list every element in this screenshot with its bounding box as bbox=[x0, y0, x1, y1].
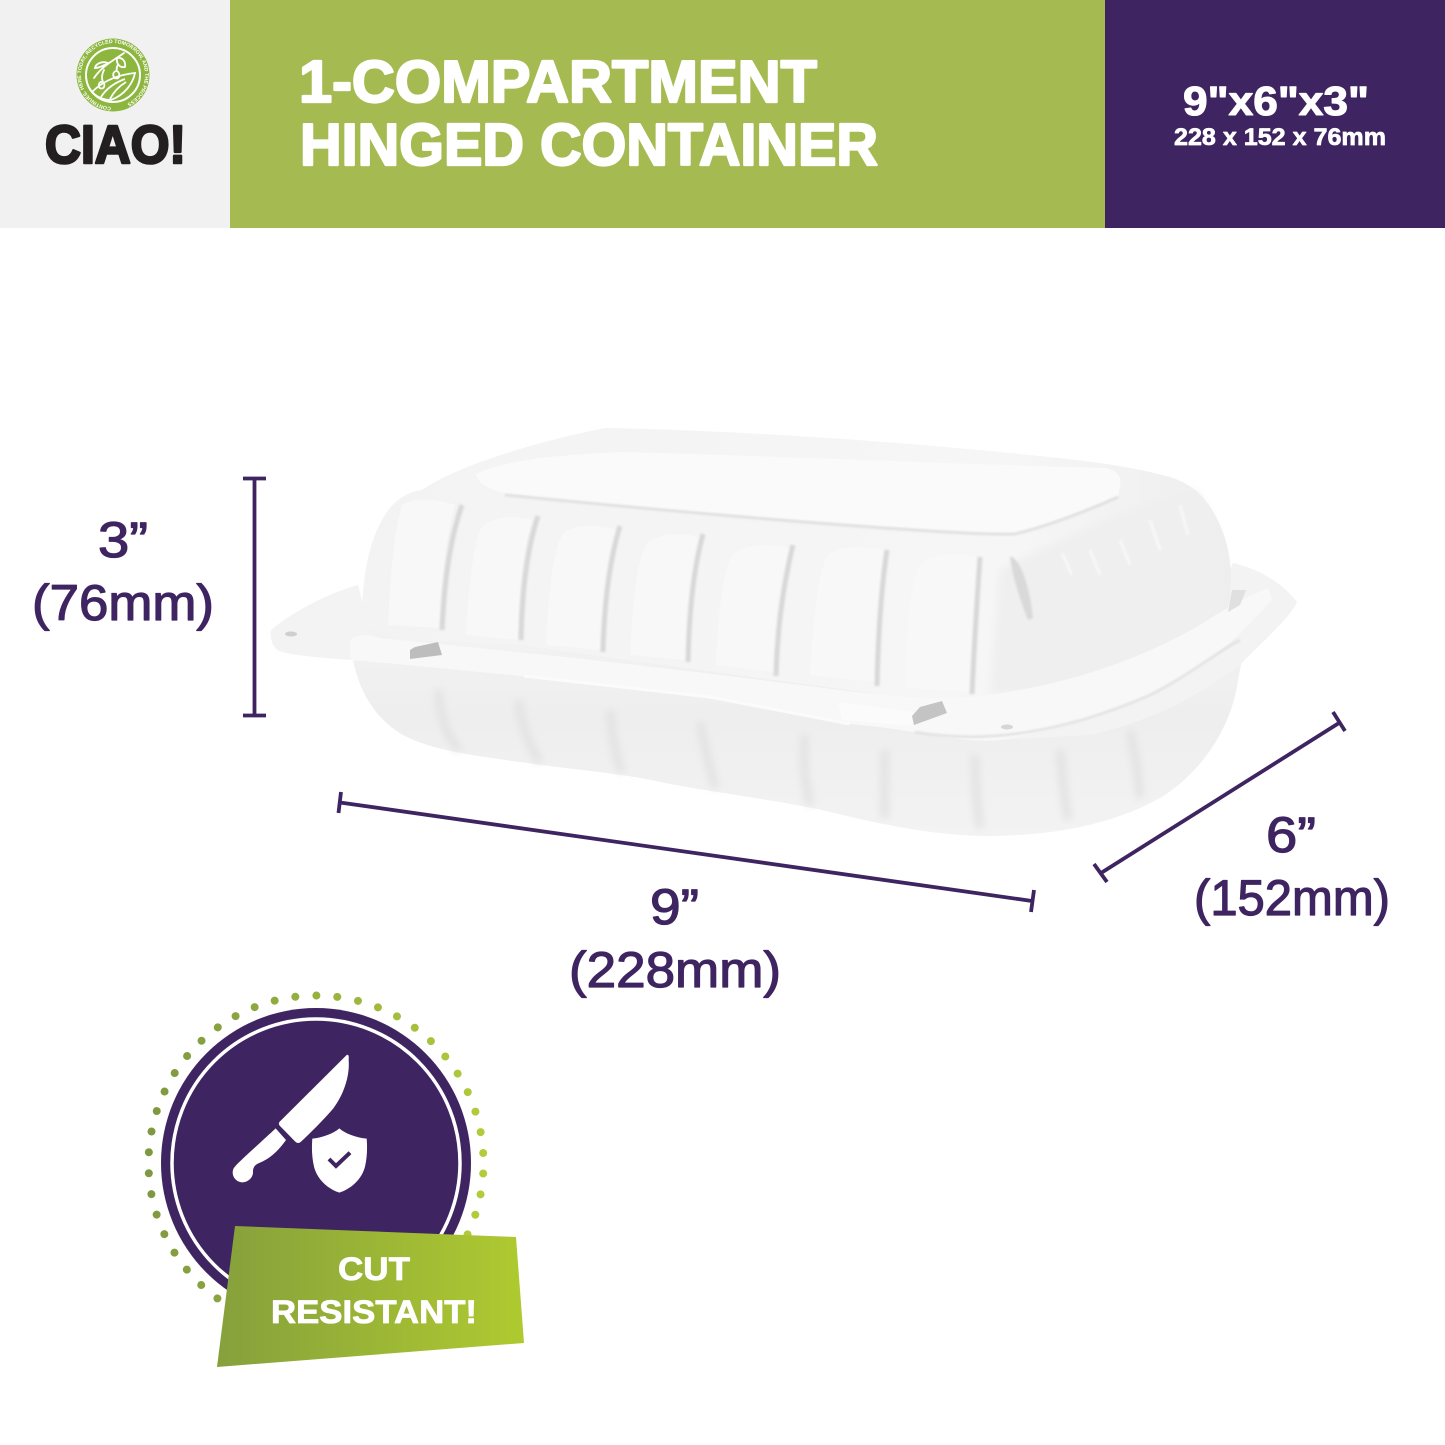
dimension: width bbox=[1094, 712, 1390, 926]
title bbox=[299, 49, 878, 178]
front clips bbox=[410, 642, 442, 659]
width label: 6” bbox=[1266, 807, 1316, 863]
textured lid panels bbox=[388, 500, 978, 692]
lid grooves bbox=[442, 505, 980, 694]
badge: cut resistant bbox=[138, 985, 524, 1367]
height bracket bbox=[243, 478, 266, 716]
header: title panel bbox=[230, 0, 1105, 228]
raised lid top panel bbox=[476, 452, 1120, 533]
header: logo panel bbox=[0, 0, 230, 228]
tray ribs bbox=[438, 690, 1140, 828]
length bracket bbox=[338, 792, 1034, 912]
width label: (152mm) bbox=[1194, 870, 1390, 926]
purple disc bbox=[161, 1008, 471, 1318]
logo wordmark: CIAO! bbox=[45, 115, 186, 175]
height label: (76mm) bbox=[32, 575, 214, 631]
ribbon text bbox=[271, 1251, 477, 1330]
width bracket bbox=[1094, 712, 1345, 882]
length label: (228mm) bbox=[569, 942, 781, 998]
title: HINGED CONTAINER bbox=[300, 112, 878, 178]
hinge detail bbox=[1228, 590, 1246, 612]
ribbon text: RESISTANT! bbox=[271, 1294, 477, 1330]
flange holes bbox=[285, 632, 297, 636]
size in millimetres: 228 x 152 x 76mm bbox=[1174, 124, 1386, 151]
green ribbon bbox=[217, 1226, 524, 1367]
icon: knife and shield bbox=[233, 1055, 367, 1193]
height label bbox=[32, 512, 214, 631]
length label bbox=[569, 879, 781, 998]
width label bbox=[1194, 807, 1390, 926]
dimension: height bbox=[32, 478, 266, 716]
logo badge: CONTINUES. HERE TODAY, RECYCLED TOMORROW, AND THE PROCESS bbox=[77, 40, 149, 110]
size in inches: 9"x6"x3" bbox=[1183, 78, 1369, 124]
dimension: length bbox=[338, 792, 1034, 998]
lid corner dimple bbox=[1010, 556, 1033, 620]
length label: 9” bbox=[650, 879, 699, 935]
ribbon text: CUT bbox=[338, 1251, 410, 1287]
title: 1-COMPARTMENT bbox=[299, 49, 817, 115]
rim band bbox=[350, 588, 1272, 741]
container base tray bbox=[352, 600, 1244, 836]
lid corner highlights bbox=[1062, 505, 1188, 575]
dotted ring bbox=[138, 985, 494, 1341]
lid top panel edge shadow bbox=[505, 495, 1118, 534]
left and right flange bbox=[271, 585, 372, 660]
product photo: hinged container bbox=[271, 428, 1297, 836]
lid corner shading bbox=[990, 490, 1226, 695]
lid dome bbox=[362, 428, 1231, 705]
header: size panel bbox=[1105, 0, 1445, 228]
height label: 3” bbox=[98, 512, 148, 568]
tray edge line bbox=[524, 676, 850, 724]
